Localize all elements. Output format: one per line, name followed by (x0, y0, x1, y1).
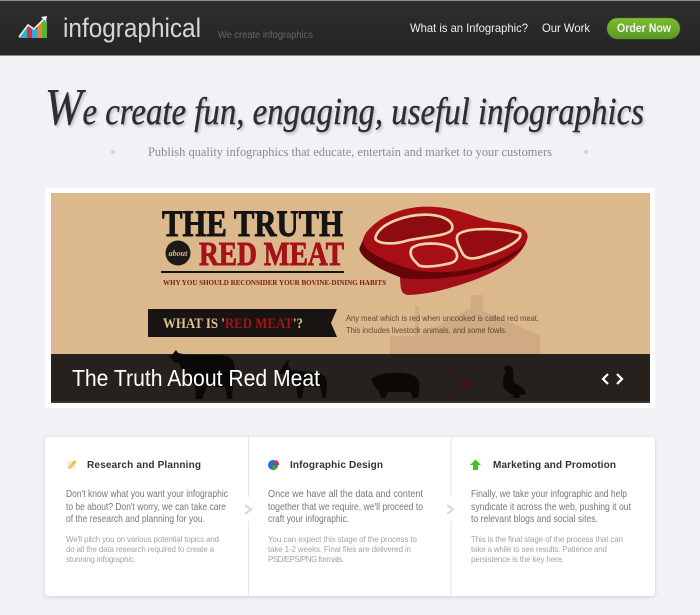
detail text: This is the final stage of the process that can (471, 535, 623, 544)
body text: together that we require, we'll proceed to (268, 501, 423, 513)
detail text: persistence is the key here. (471, 555, 564, 564)
detail text: do all the data research required to create a (66, 545, 215, 554)
order now button (607, 18, 680, 39)
detail text (66, 535, 219, 564)
detail text: take 1-2 weeks. Final files are delivered in (268, 545, 411, 554)
tagline: We create infographics (218, 29, 313, 41)
body text (471, 488, 631, 525)
body text (268, 488, 423, 525)
icon: pencil note (67, 460, 76, 469)
panel: process steps (45, 437, 655, 596)
nav links: Our Work (542, 21, 591, 35)
logo wordmark: infographical (63, 13, 201, 43)
order now button: Order Now (617, 23, 671, 35)
detail text: You can expect this stage of the process to (268, 535, 418, 544)
detail text (268, 535, 418, 564)
detail text: PSD/EPS/PNG formats. (268, 555, 344, 564)
poster title: RED MEAT (199, 236, 344, 273)
body text: Don't know what you want your infographic (66, 488, 228, 500)
chevron (243, 497, 255, 521)
detail text: take a while to see results. Patience and (471, 545, 607, 554)
panel: research and planning (66, 460, 228, 564)
detail text: stunning infographic. (66, 555, 136, 564)
what is red meat banner (148, 309, 337, 337)
steak illustration (359, 207, 528, 295)
red meat definition (346, 315, 538, 334)
header bar (0, 0, 700, 56)
logo icon (19, 16, 47, 38)
body text (66, 488, 228, 525)
icon: green arrow (470, 460, 481, 470)
caption bar (51, 354, 650, 403)
red meat definition: Any meat which is red when uncooked is called red meat. (346, 313, 539, 323)
body text: to be about? Don't worry, we can take care (66, 501, 226, 513)
heading: Research and Planning (87, 460, 201, 471)
detail text (471, 535, 623, 564)
chevron (445, 497, 457, 521)
body text: craft your infographic. (268, 513, 349, 525)
heading: Infographic Design (290, 460, 383, 471)
panel: marketing and promotion (470, 460, 631, 564)
nav links (410, 21, 591, 35)
body text: syndicate it across the web, pushing it out (471, 501, 631, 513)
body text: Once we have all the data and content (268, 488, 423, 500)
subheading: Publish quality infographics that educate, entertain and market to your customers (148, 144, 552, 159)
body text: to relevant blogs and social sites. (471, 513, 598, 525)
detail text: We'll pitch you on various potential topics and (66, 535, 219, 544)
panel: infographic design (268, 460, 423, 564)
heading: Marketing and Promotion (493, 460, 616, 471)
red meat definition: This includes livestock animals, and some fowls. (346, 325, 507, 335)
poster title: WHY YOU SHOULD RECONSIDER YOUR BOVINE-DINING HABITS (163, 278, 386, 287)
body text: of the research and planning for you. (66, 513, 205, 525)
animal silhouettes (167, 350, 527, 399)
what is red meat banner: WHAT IS 'RED MEAT'? (163, 316, 303, 332)
poster title (161, 211, 386, 285)
slider arrows (603, 374, 622, 384)
icon: colour circle (268, 460, 279, 470)
hero slider (45, 188, 655, 408)
farmhouse silhouette (390, 295, 540, 354)
nav links: What is an Infographic? (410, 21, 528, 35)
body text: Finally, we take your infographic and help (471, 488, 627, 500)
caption text: The Truth About Red Meat (72, 365, 321, 391)
poster title: THE TRUTH (162, 204, 343, 245)
poster title: about (169, 249, 188, 258)
